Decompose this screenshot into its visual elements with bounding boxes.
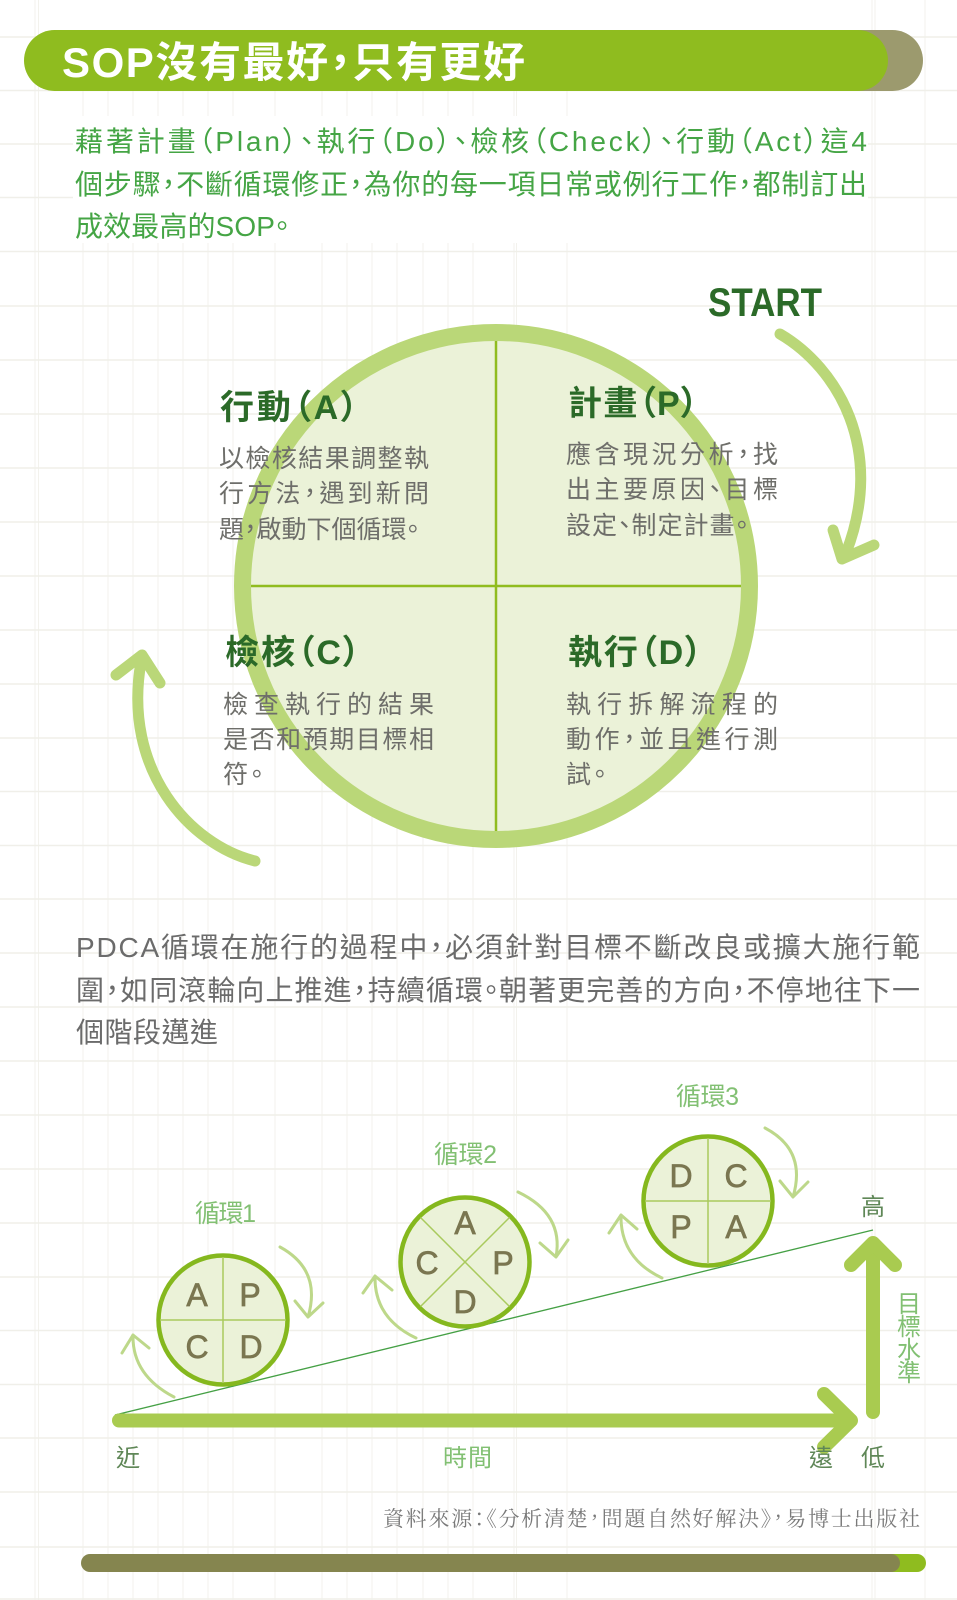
quadrant: act [219,389,429,544]
quadrant: do [566,634,778,789]
axis labels: 遠 [809,1445,833,1472]
quadrant: plan [566,385,778,540]
quadrant: do: 執行（D） [568,634,702,672]
cycle 1: D [239,1329,263,1365]
quadrant: plan: 出主要原因、目標 [566,476,778,504]
intro paragraph [75,126,867,242]
footer bar [81,1554,926,1572]
cycle 3: P [670,1209,692,1245]
quadrant: do: 試。 [566,761,606,789]
quadrant: act: 題，啟動下個循環。 [219,516,419,544]
quadrant: check: 檢查執行的結果 [223,691,434,719]
title text: SOP沒有最好，只有更好 [62,39,525,86]
quadrant: act: 行動（A） [220,389,358,427]
cycle 2: 循環2 [434,1141,497,1169]
cycle 3 [609,1083,808,1278]
second paragraph [76,932,920,1048]
chart: rising PDCA cycles [115,1083,921,1472]
intro paragraph: 個步驟，不斷循環修正，為你的每一項日常或例行工作，都制訂出 [75,169,867,200]
time axis arrow [119,1394,851,1447]
incline line [115,1230,873,1415]
cycle 3: C [724,1158,748,1194]
second paragraph: 圍，如同滾輪向上推進，持續循環。朝著更完善的方向，不停地往下一 [76,975,920,1006]
cycle 1: A [186,1277,208,1313]
axis labels: 水 [897,1337,921,1364]
cycle 1 [122,1200,323,1397]
cycle 1: P [239,1277,261,1313]
quadrant: plan: 應含現況分析，找 [566,441,778,469]
intro paragraph: 成效最高的SOP。 [75,211,289,242]
intro paragraph: 藉著計畫（Plan）、執行（Do）、檢核（Check）、行動（Act）這4 [75,126,867,157]
second paragraph: PDCA循環在施行的過程中，必須針對目標不斷改良或擴大施行範 [76,932,920,963]
axis labels: 準 [897,1360,921,1387]
cycle 3: 循環3 [676,1083,739,1111]
cycle 2: P [492,1245,514,1281]
title banner [24,30,923,91]
axis labels: 時間 [443,1445,492,1472]
axis labels: 低 [861,1445,885,1472]
source credit: 資料來源：《分析清楚，問題自然好解決》，易博士出版社 [383,1507,920,1531]
cycle 3: A [725,1209,747,1245]
cycle 2: C [415,1245,439,1281]
cycle 2: A [454,1205,476,1241]
axis labels [116,1194,921,1472]
axis labels: 目 [897,1291,921,1318]
cycle 3: D [669,1158,693,1194]
PDCA circle [242,332,750,840]
quadrant: plan: 計畫（P） [568,385,698,423]
quadrant: plan: 設定、制定計畫。 [566,512,748,540]
arrow: check to act [116,655,255,861]
second paragraph: 個階段邁進 [76,1017,218,1048]
label: START: START [708,281,822,325]
axis labels: 近 [116,1445,140,1472]
quadrant: do: 執行拆解流程的 [566,691,778,719]
quadrant: check: 是否和預期目標相 [223,726,434,754]
axis labels: 高 [861,1194,885,1221]
quadrant: do: 動作，並且進行測 [566,726,778,754]
quadrant: check [223,634,434,789]
quadrant: act: 行方法，遇到新問 [219,480,429,508]
quadrant: check: 符。 [223,761,263,789]
quadrant: check: 檢核（C） [225,634,360,672]
goal level axis arrow [851,1243,895,1412]
cycle 1: 循環1 [195,1200,256,1228]
cycle 1: C [185,1329,209,1365]
cycle 2: D [453,1284,477,1320]
quadrant: act: 以檢核結果調整執 [219,445,429,473]
arrow: start to plan [780,334,874,559]
cycle 2 [363,1141,568,1338]
axis labels: 標 [897,1314,921,1341]
